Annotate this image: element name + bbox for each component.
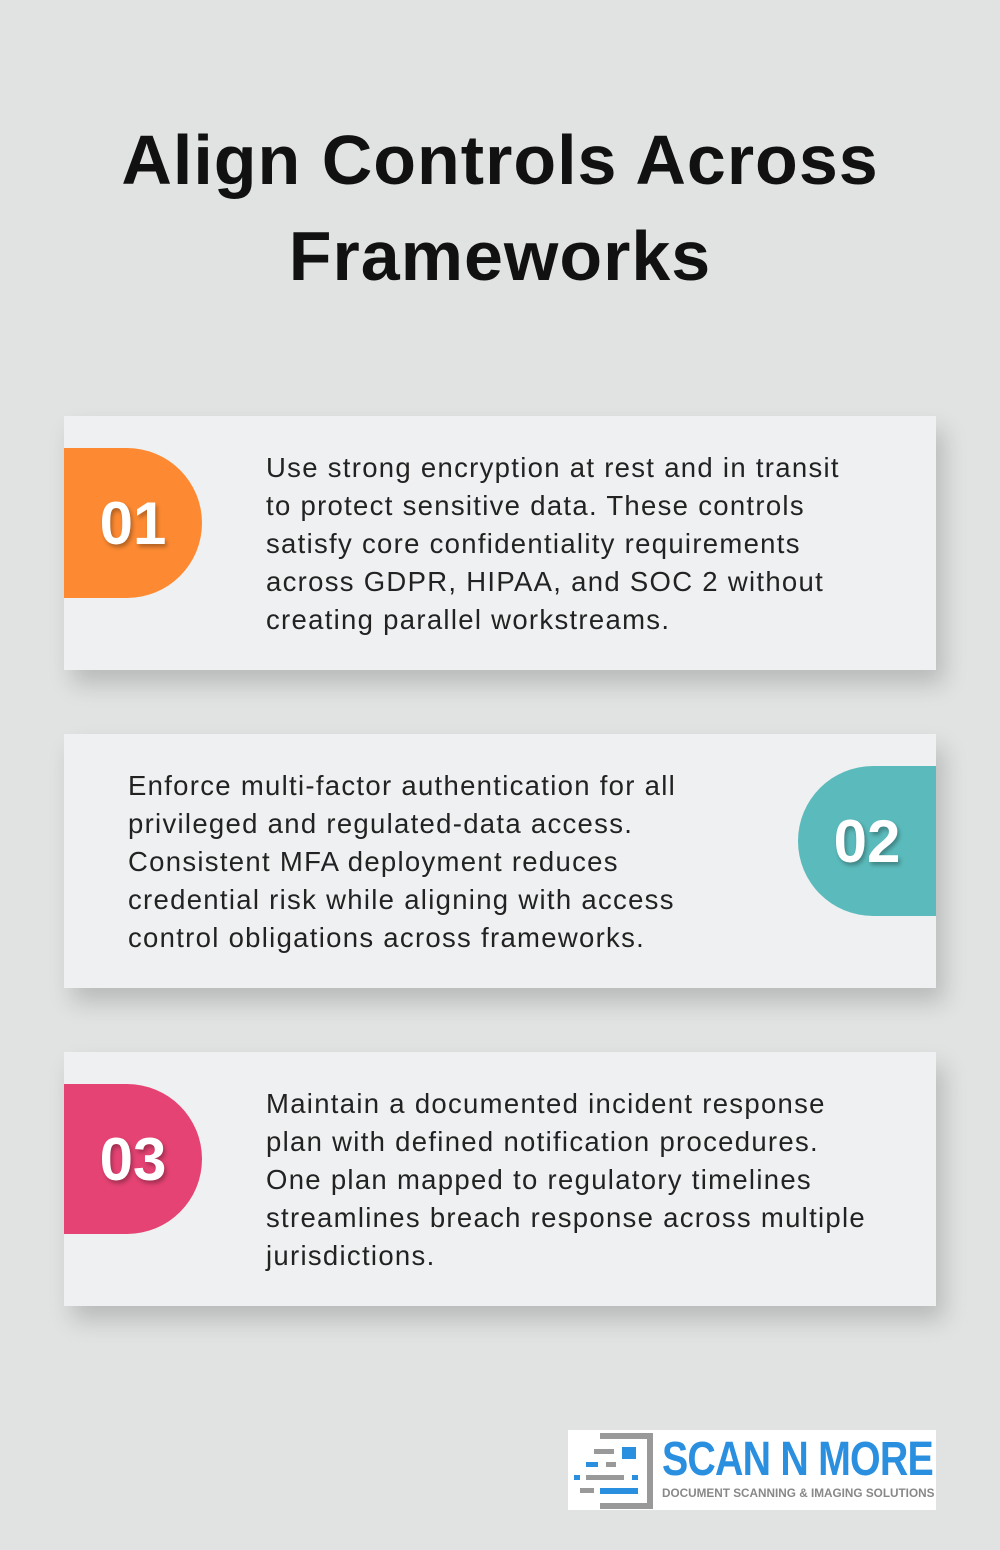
panel: step 03 [64,1052,936,1306]
text 01: across GDPR, HIPAA, and SOC 2 without [266,566,824,597]
text 02: privileged and regulated-data access. [128,808,633,839]
title [121,121,879,295]
text 02: credential risk while aligning with access [128,884,675,915]
badge 03 [64,1084,202,1234]
icon: logo mark [574,1433,653,1509]
text 03: streamlines breach response across multiple [266,1202,866,1233]
text 02 [128,770,676,953]
badge 01 [64,448,202,598]
text 01: satisfy core confidentiality requirements [266,528,801,559]
title: Align Controls Across [121,121,879,199]
text 01: Use strong encryption at rest and in transit [266,452,840,483]
panel: step 01 [64,416,936,670]
panel: step 02 [64,734,936,988]
text 03 [265,1088,866,1271]
text 03: jurisdictions. [266,1240,436,1271]
text 01: creating parallel workstreams. [266,604,670,635]
text 03: plan with defined notification procedures. [266,1126,819,1157]
logo [568,1430,936,1510]
text 02: control obligations across frameworks. [128,922,645,953]
badge 02 [798,766,936,916]
text 01: to protect sensitive data. These controls [266,490,805,521]
badge 02: 02 [834,808,900,874]
badge 01: 01 [100,490,166,556]
text 03: Maintain a documented incident response [266,1088,826,1119]
logo text: SCAN N MORE [662,1433,933,1486]
text 03: One plan mapped to regulatory timelines [266,1164,812,1195]
text 01 [266,452,840,635]
badge 03: 03 [100,1126,166,1192]
title: Frameworks [289,217,711,295]
logo: DOCUMENT SCANNING & IMAGING SOLUTIONS [662,1486,934,1500]
text 02: Enforce multi-factor authentication for all [128,770,676,801]
text 02: Consistent MFA deployment reduces [128,846,619,877]
